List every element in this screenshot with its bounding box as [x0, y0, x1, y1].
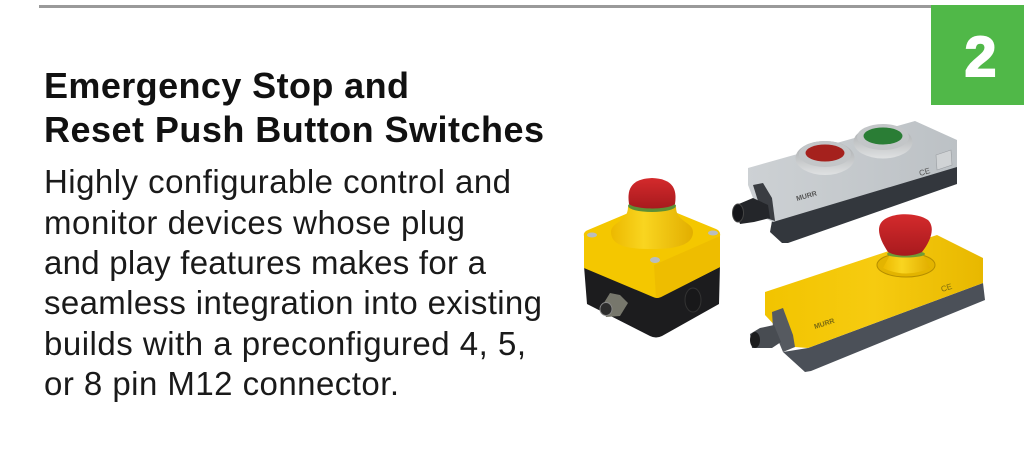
dark base — [770, 166, 957, 243]
product: yellow single-button emergency stop box — [584, 178, 720, 338]
description text: Highly configurable control and — [44, 163, 511, 200]
black housing base — [584, 265, 720, 338]
green illuminated button — [854, 124, 912, 158]
title: Reset Push Button Switches — [44, 109, 544, 150]
red mushroom button — [879, 214, 932, 256]
screws — [587, 232, 597, 238]
description text: monitor devices whose plug — [44, 204, 465, 241]
number badge — [931, 5, 1024, 105]
number badge: 2 — [965, 25, 996, 89]
top rule — [39, 5, 931, 8]
title: Emergency Stop and — [44, 65, 409, 106]
connector recess — [753, 183, 775, 221]
button collar — [877, 253, 935, 277]
description text: seamless integration into existing — [44, 284, 542, 321]
connector — [750, 325, 781, 348]
grey top face — [748, 121, 957, 222]
description text: or 8 pin M12 connector. — [44, 365, 399, 402]
product: yellow rectangular emergency stop: CE — [940, 282, 953, 294]
title — [44, 65, 544, 150]
connector recess — [772, 308, 795, 352]
red illuminated button — [796, 141, 854, 175]
yellow dome collar — [611, 207, 693, 249]
description text: and play features makes for a — [44, 244, 487, 281]
QR code — [936, 150, 952, 170]
description text: builds with a preconfigured 4, 5, — [44, 325, 526, 362]
product: yellow rectangular emergency stop — [750, 214, 985, 372]
green ring — [628, 200, 676, 212]
dark base — [783, 283, 985, 372]
product: grey two-button control station — [732, 121, 957, 243]
description text — [44, 163, 542, 402]
connector — [734, 198, 770, 224]
device label: MURR — [796, 190, 818, 203]
yellow top face — [765, 235, 983, 348]
green ring — [887, 250, 925, 258]
product: grey two-button control station: CE — [918, 166, 931, 178]
blind plug — [685, 288, 701, 312]
device label: MURR — [813, 318, 836, 331]
yellow housing — [584, 206, 720, 298]
red button — [628, 178, 676, 208]
M12 connector — [602, 293, 628, 317]
